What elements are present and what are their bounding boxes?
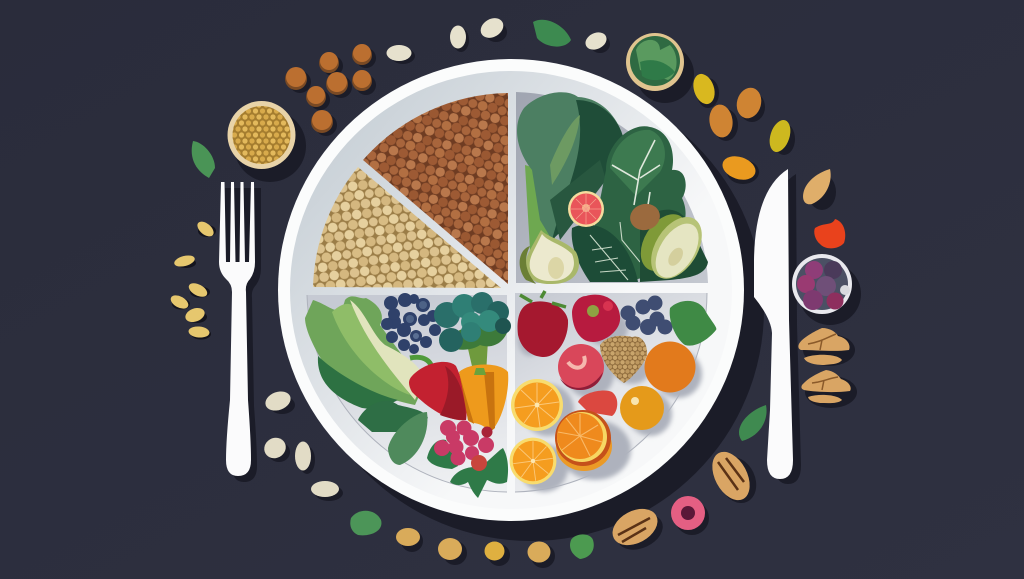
pink apple [558, 344, 604, 390]
rear stems and shading [550, 160, 606, 240]
lower dark leaf [572, 225, 638, 282]
fork [219, 182, 255, 476]
leaf, top [533, 20, 571, 47]
round seeds, bottom [396, 528, 555, 568]
walnut, right upper [798, 328, 855, 366]
raspberry cluster [434, 420, 494, 471]
blood orange slice [568, 191, 604, 227]
blueberry cluster [381, 293, 441, 354]
small apple [578, 390, 617, 416]
left fig half [520, 230, 579, 284]
berry leaves [427, 440, 508, 498]
light inner leaf [550, 115, 580, 185]
red ribbed pepper [572, 295, 620, 342]
stacked orange slices [555, 410, 612, 471]
bright top of right leaf [610, 130, 665, 196]
dark spinach leaves [318, 356, 398, 410]
vegetables [305, 292, 511, 498]
pale cabbage rib [350, 300, 424, 400]
dark side of large leaf [552, 100, 625, 240]
orange bell pepper [459, 364, 508, 432]
yellow orange [620, 386, 664, 430]
red dried fruit [814, 219, 845, 248]
green leaf, bottom [570, 534, 594, 559]
large orange fruit [644, 342, 696, 392]
pale nuts, lower left [260, 388, 343, 501]
dark red pepper [518, 291, 568, 357]
lower leaf veins [590, 222, 640, 280]
knife shadow [762, 174, 801, 484]
broccoli [434, 292, 511, 375]
walnut, bottom [606, 502, 669, 557]
leafy greens [517, 92, 712, 288]
yellow seeds, left [169, 219, 216, 340]
yellow and orange nuts, upper right [690, 71, 836, 210]
blueberries [620, 296, 672, 335]
outer green lettuce [305, 296, 424, 405]
right fig half [630, 202, 712, 288]
walnut, bottom right [705, 446, 763, 509]
leaf, upper left [192, 141, 215, 178]
bowl of spinach [626, 33, 694, 103]
green leaf, bottom left [350, 511, 381, 535]
walnut, right lower [801, 370, 857, 408]
brown discs [285, 44, 376, 136]
raspberry [671, 496, 709, 535]
bowl of grains [228, 101, 306, 182]
knife [754, 169, 793, 479]
citrus slice upper left [511, 379, 563, 431]
fork shadow [225, 188, 261, 482]
grain heart [600, 336, 647, 383]
bottom cabbage leaf [388, 412, 427, 465]
far right foliage [640, 210, 708, 282]
panel: lentils [363, 93, 508, 284]
plate shadow [298, 77, 764, 541]
right collard leaf [592, 126, 686, 282]
panel: vegetables section [307, 295, 507, 492]
tall pale stems [525, 165, 556, 250]
green leaf [670, 301, 716, 346]
large collard leaf [517, 92, 625, 240]
panel: leafy greens section [516, 92, 708, 283]
panel: fruit section [515, 293, 707, 492]
fruit [510, 291, 716, 492]
lower spinach leaf [358, 401, 428, 432]
panel: chickpeas [313, 167, 501, 288]
mid lettuce [332, 304, 410, 395]
red bell pepper [409, 357, 467, 420]
plate [278, 59, 744, 521]
citrus slice lower left [510, 438, 556, 484]
bowl of purple berries [792, 254, 861, 325]
leaf, right bottom [739, 405, 767, 441]
white leaf veins [612, 140, 660, 205]
soft shadows under fruit [518, 310, 702, 492]
section rim line [307, 293, 707, 492]
white nuts, top [386, 14, 610, 64]
almond on greens [627, 201, 663, 233]
